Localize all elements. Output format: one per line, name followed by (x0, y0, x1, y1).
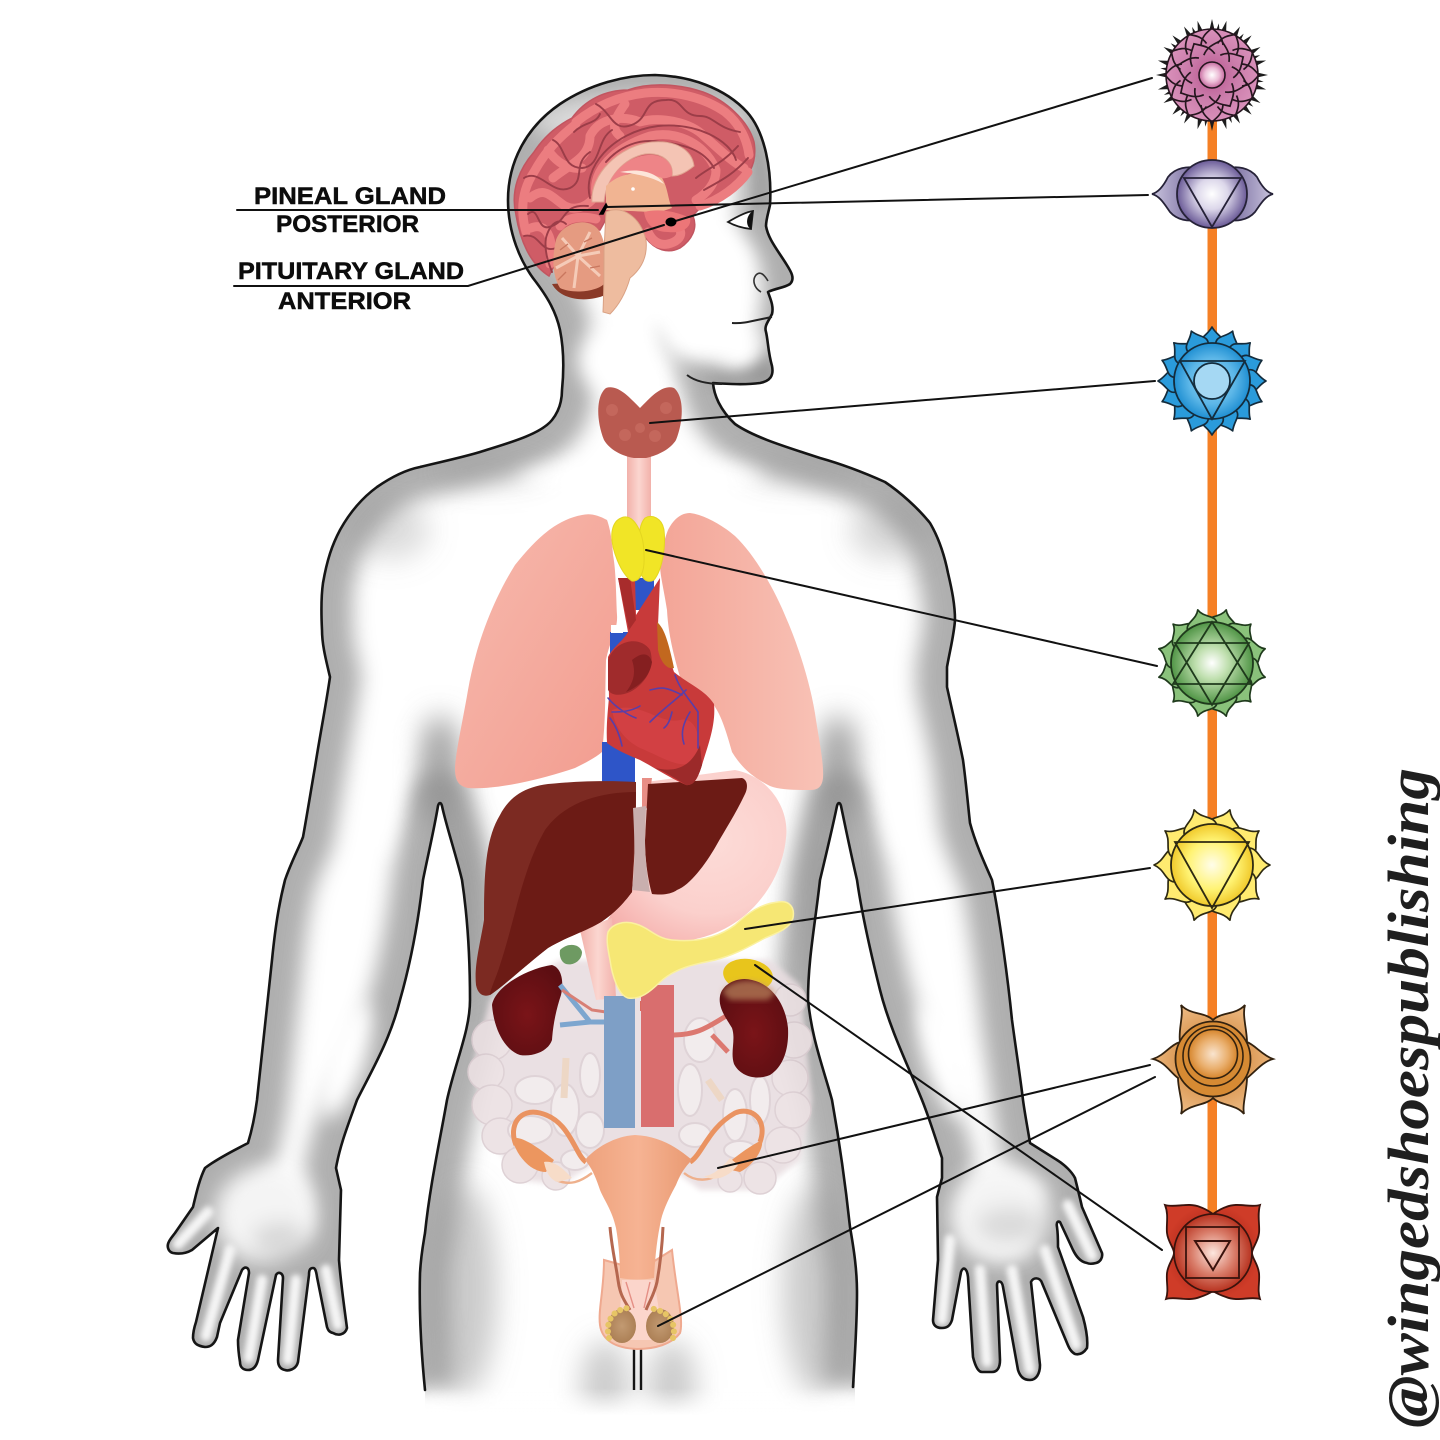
labels: POSTERIOR (276, 211, 419, 238)
callout lines (234, 78, 1152, 286)
epididymis (608, 1308, 674, 1338)
corpus callosum (592, 142, 694, 202)
hypothalamus region (644, 210, 690, 232)
thymus gland (612, 516, 665, 581)
adrenal gland (721, 956, 775, 994)
sacral to ovary (718, 1065, 1150, 1168)
chakra: crown (1156, 19, 1268, 131)
chakra: heart (1155, 606, 1269, 720)
pineal label (237, 209, 598, 211)
labels: PINEAL GLAND (254, 183, 446, 210)
stomach (596, 770, 786, 945)
ureters (564, 1058, 566, 1098)
left ovary fimbria (512, 1138, 554, 1172)
cerebellum (552, 222, 607, 299)
gyri folds (524, 100, 748, 272)
crown to pituitary (672, 78, 1152, 222)
labels (238, 183, 464, 315)
abdominal aorta (641, 985, 674, 1127)
face features (687, 211, 772, 384)
testes (608, 1309, 636, 1343)
watermark handle: @wingedshoespublishing (1376, 768, 1440, 1428)
brain (514, 85, 755, 314)
eye (728, 211, 753, 229)
chakra: third eye (1152, 160, 1273, 228)
trachea (627, 445, 651, 540)
fallopian tubes (513, 1112, 586, 1162)
chakra: solar plexus (1154, 805, 1270, 925)
intestines (468, 960, 812, 1194)
nose (754, 273, 768, 292)
inner thigh line (634, 1346, 641, 1390)
chakra: root (1165, 1205, 1260, 1299)
uterus (585, 1135, 692, 1280)
labels: ANTERIOR (278, 288, 411, 315)
white gap mediastinum (611, 625, 623, 633)
hand highlights (178, 1205, 1092, 1370)
labels: PITUITARY GLAND (238, 258, 464, 285)
gyri ribbons (523, 92, 749, 264)
brainstem (603, 210, 646, 314)
reproductive organs (512, 1111, 762, 1349)
pituitary label (234, 225, 664, 286)
heart (607, 578, 714, 785)
lower esophagus tube (580, 918, 616, 1000)
renal vessels (560, 985, 728, 1052)
jaw shade (708, 350, 771, 383)
face highlight (520, 94, 765, 496)
chakra: throat (1158, 327, 1266, 435)
cerebral cortex (514, 85, 755, 276)
chakra column line (1208, 120, 1217, 1215)
pituitary gland marker (666, 218, 676, 226)
gap strip beside esophagus (636, 778, 648, 810)
jaw (687, 375, 722, 384)
great vessels blue (602, 578, 654, 784)
thalamus (606, 173, 672, 212)
ovary ligaments (556, 1172, 722, 1183)
brow to pineal (607, 195, 1148, 207)
vas deferens (610, 1227, 663, 1310)
lungs (455, 513, 823, 790)
small intestine (508, 1018, 770, 1170)
root to adrenal (755, 965, 1162, 1250)
esophagus segment (642, 778, 652, 814)
left kidney (492, 965, 562, 1055)
heart to thymus (646, 550, 1157, 666)
pancreas (607, 902, 793, 998)
throat to thyroid (650, 381, 1155, 423)
forehead shade (754, 146, 766, 208)
inferior vena cava (604, 996, 635, 1128)
liver (476, 778, 747, 996)
gallbladder (560, 945, 582, 964)
thyroid gland (598, 387, 682, 458)
solar plexus to pancreas (745, 868, 1150, 929)
right kidney top fade (722, 980, 776, 1000)
pineal gland marker (600, 204, 607, 214)
colon (468, 984, 812, 1194)
sacral to testis (658, 1077, 1155, 1326)
right kidney (720, 979, 788, 1078)
scrotum (600, 1250, 681, 1349)
remaining callout lines (646, 381, 1162, 1326)
mouth (732, 317, 772, 323)
human body silhouette (168, 75, 1102, 1430)
chakra: sacral (1153, 1005, 1273, 1114)
